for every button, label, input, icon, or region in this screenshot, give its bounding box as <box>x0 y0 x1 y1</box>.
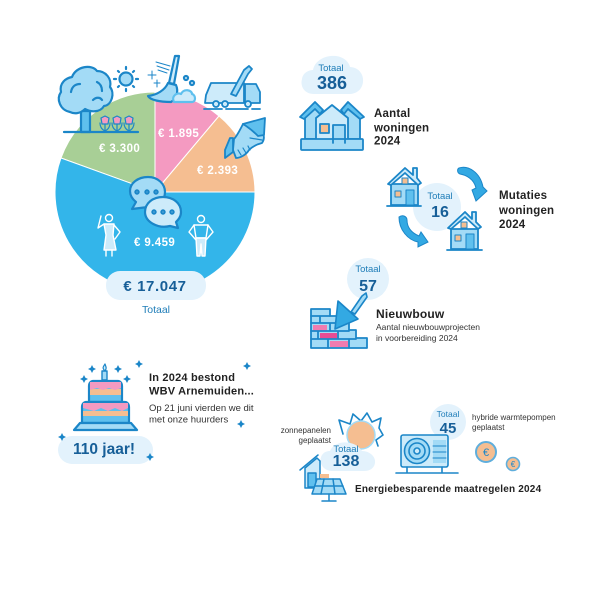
label: aantal woningen: Aantal <box>374 108 410 120</box>
icon: small coin: € <box>511 460 516 469</box>
text: op 21 juni: met onze huurders <box>149 414 228 426</box>
icon: house left <box>387 168 421 206</box>
icon: brick wall <box>311 309 367 348</box>
text: in 2024 bestond: WBV Arnemuiden... <box>149 386 254 398</box>
icon: house with solar panels <box>300 455 346 501</box>
text: nieuwbouwprojecten: in voorbereiding 2024 <box>376 333 458 343</box>
label: mutaties woningen: woningen <box>498 205 554 217</box>
cloud: 138: 138 <box>333 453 359 470</box>
text: in 2024 bestond: In 2024 bestond <box>149 372 235 384</box>
sparkles <box>58 360 251 461</box>
icon: tulips <box>100 116 134 131</box>
heading: energiebesparende maatregelen: Energiebesparende maatregelen 2024 <box>355 484 542 495</box>
icon: garbage truck <box>204 66 260 109</box>
icon: house right <box>447 212 482 250</box>
icon: speech bubbles <box>130 177 181 228</box>
icon: woman <box>98 214 120 256</box>
icon: man <box>189 216 213 256</box>
total caption: Totaal <box>142 304 170 316</box>
label: aantal woningen: 2024 <box>374 136 401 148</box>
pie value: blue: € 9.459 <box>134 237 175 249</box>
text: hybride warmtepompen: hybride warmtepompen <box>472 413 556 422</box>
total circle: 16 <box>413 183 461 231</box>
icon: tree <box>59 67 138 132</box>
icon: heat pump <box>396 435 458 473</box>
arrow: left curve <box>399 216 428 247</box>
text: zonnepanelen: zonnepanelen <box>281 426 331 435</box>
icon: houses <box>300 102 364 150</box>
cloud: 386 <box>302 56 363 94</box>
text: hybride warmtepompen: geplaatst <box>472 423 505 432</box>
total pill <box>106 271 206 300</box>
total circle: 57 <box>347 258 389 300</box>
icon: trowel <box>335 293 367 329</box>
heading: nieuwbouw: Nieuwbouw <box>376 307 445 321</box>
arrow: right curve <box>458 167 487 201</box>
total pill: € 17.047 <box>123 278 187 295</box>
text: nieuwbouwprojecten: Aantal nieuwbouwprojecten <box>376 322 480 332</box>
total circle: 57: Totaal <box>355 264 381 275</box>
icon: sun <box>114 67 138 91</box>
icon: cake <box>74 364 137 430</box>
text: op 21 juni: Op 21 juni vierden we dit <box>149 403 254 414</box>
pill: 110 jaar: 110 jaar! <box>73 441 135 458</box>
total circle: 16: 16 <box>431 204 449 221</box>
cloud: 386: 386 <box>317 73 347 93</box>
icon: large coin: € <box>483 447 489 459</box>
icon: small coin <box>506 458 520 470</box>
total circle: 45 <box>430 404 466 440</box>
total circle: 45: Totaal <box>437 409 459 419</box>
cloud: 138 <box>321 442 375 471</box>
icon: sun behind cloud <box>339 413 383 449</box>
icon: handshake <box>225 118 265 158</box>
cloud: 138: Totaal <box>333 444 359 455</box>
pie chart: costs <box>55 92 255 292</box>
icon: broom and dust <box>148 56 195 102</box>
pie value: green: € 3.300 <box>99 143 140 155</box>
total circle: 45: 45 <box>440 420 456 437</box>
pie value: orange: € 2.393 <box>197 165 238 177</box>
icon: large coin <box>476 442 496 462</box>
total circle: 57: 57 <box>359 278 377 295</box>
text: zonnepanelen: geplaatst <box>299 436 332 445</box>
pill: 110 jaar <box>58 436 153 464</box>
label: mutaties woningen: Mutaties <box>499 190 547 202</box>
pie value: pink: € 1.895 <box>158 128 199 140</box>
label: mutaties woningen: 2024 <box>499 219 526 231</box>
cloud: 386: Totaal <box>318 63 344 74</box>
label: aantal woningen: woningen <box>373 122 429 134</box>
total circle: 16: Totaal <box>427 191 453 202</box>
